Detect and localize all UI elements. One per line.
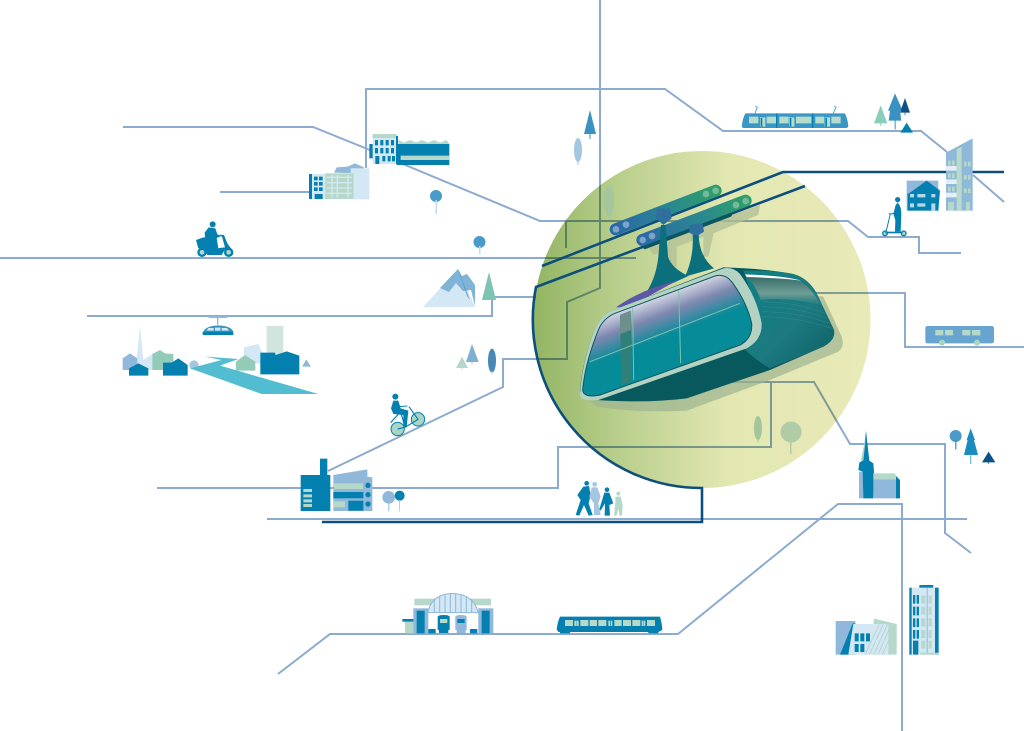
trees beside church (950, 428, 995, 464)
high rise (909, 585, 939, 655)
regional train (557, 617, 662, 633)
river (190, 357, 318, 394)
rear panel (743, 271, 834, 368)
office block (309, 163, 369, 199)
window frame (580, 268, 762, 400)
factory with chimney (301, 459, 372, 511)
trees inside disc (604, 185, 802, 454)
dark cable and station line (322, 172, 1004, 522)
track rail front (639, 198, 749, 247)
studio building (836, 619, 897, 655)
highlight disc behind cable car (534, 151, 870, 488)
electric scooter rider (883, 197, 906, 236)
window mullions (590, 290, 740, 380)
track rail rear (613, 187, 719, 233)
rear ribs (762, 302, 832, 328)
small trees upper middle (430, 110, 596, 254)
window glass (583, 275, 752, 396)
mountains with conifer (423, 269, 496, 307)
door pillar (620, 311, 632, 385)
cable car (580, 187, 843, 411)
family walking (576, 481, 623, 516)
hanger shadow (647, 205, 760, 267)
scooter rider (196, 221, 233, 257)
apartment tower (946, 138, 973, 211)
factory with sawtooth roof (369, 134, 449, 165)
cyclist (391, 394, 425, 436)
round trees by factory (382, 491, 405, 511)
river town (123, 326, 318, 394)
car body (580, 267, 834, 401)
car shadow (588, 293, 843, 411)
tram (742, 106, 848, 128)
roof sliver (616, 281, 677, 307)
rear window (745, 275, 821, 305)
conifer cluster top right (874, 93, 913, 133)
house (907, 181, 940, 211)
mini cable car icon (203, 316, 233, 335)
small trees beside cyclist (456, 344, 496, 375)
hanger arms (643, 225, 688, 297)
church (858, 431, 900, 498)
train station (402, 593, 493, 633)
bus (925, 326, 994, 346)
